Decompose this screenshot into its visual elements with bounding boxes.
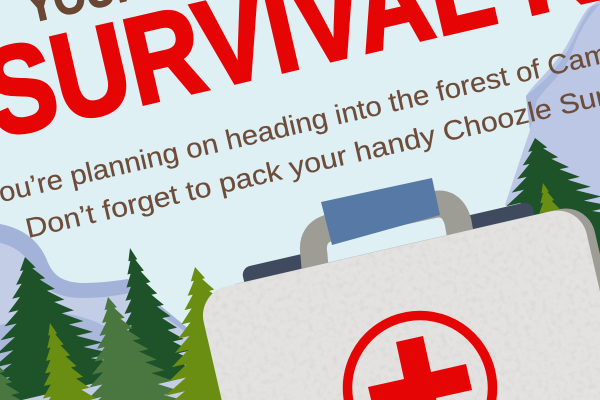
red circle — [348, 316, 492, 400]
red cross — [368, 336, 472, 400]
mountain left — [0, 224, 190, 400]
kit back bar — [242, 202, 534, 282]
trees right — [506, 138, 600, 254]
kit back shadow — [234, 208, 600, 292]
kit body — [197, 205, 600, 400]
kit handle — [313, 204, 463, 280]
trees left — [0, 248, 222, 400]
first aid kit — [197, 178, 600, 400]
kit handle grip — [321, 178, 440, 245]
mountain right — [505, 0, 600, 212]
